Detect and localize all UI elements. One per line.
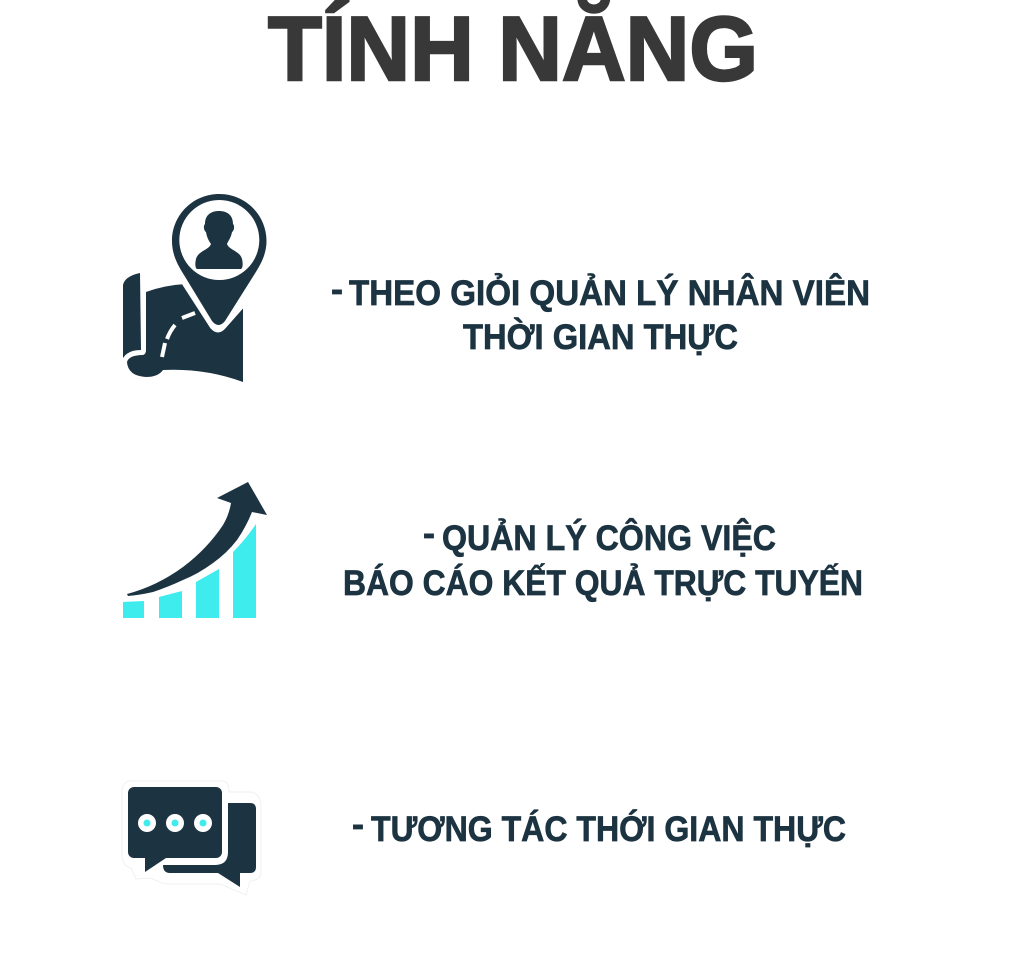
icon: map with location pin and person xyxy=(123,194,266,382)
text: staff tracking: THỜI GIAN THỰC xyxy=(463,317,738,357)
text: task management: - xyxy=(423,515,435,553)
text: staff tracking: THEO GIỎI QUẢN LÝ NHÂN VIÊN xyxy=(349,273,870,313)
icon: chat bubbles xyxy=(122,781,261,895)
text: staff tracking: - xyxy=(331,271,343,309)
text: task management: QUẢN LÝ CÔNG VIỆC xyxy=(442,518,776,558)
text: real-time interaction: - xyxy=(352,806,364,844)
icon: growth chart with arrow xyxy=(123,482,267,618)
text: staff tracking xyxy=(331,271,870,357)
title: TÍNH NĂNG xyxy=(268,0,758,100)
text: task management: BÁO CÁO KẾT QUẢ TRỰC TUYẾN xyxy=(343,563,863,603)
text: real-time interaction: TƯƠNG TÁC THỚI GIAN THỰC xyxy=(371,809,846,849)
text: task management xyxy=(343,515,863,603)
